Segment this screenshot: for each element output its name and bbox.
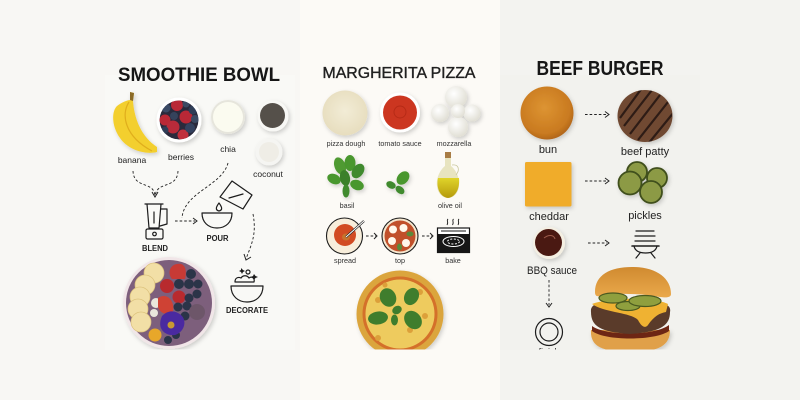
arrow: blend to pour — [175, 218, 197, 224]
label: coconut: coconut — [253, 169, 284, 179]
label: top: top — [395, 256, 405, 265]
arrow: banana and berries to blend — [133, 171, 178, 197]
icon: bun — [520, 86, 574, 140]
label: banana: banana — [118, 155, 146, 165]
icon: plate — [536, 318, 562, 346]
icon: pour bowl — [202, 213, 232, 228]
label: basil: basil — [340, 201, 355, 210]
icon: basil — [326, 155, 367, 198]
photo: burger — [591, 267, 671, 352]
icon: bbq sauce — [533, 227, 565, 259]
icon: cheddar — [525, 162, 572, 206]
icon: basil sprig — [385, 169, 412, 196]
arrow: bun to patty — [585, 112, 609, 118]
panel: smoothie bowl — [113, 64, 289, 349]
icon: chia bowl — [258, 100, 288, 132]
icon: top — [382, 218, 418, 254]
label: chia: chia — [220, 144, 236, 154]
panel: margherita pizza — [322, 65, 480, 358]
arrow: chia to pour — [182, 163, 228, 218]
icon: measuring jug pouring — [216, 181, 252, 211]
label: cheddar: cheddar — [529, 211, 569, 223]
arrow: spread to top — [366, 233, 377, 239]
label: pickles: pickles — [628, 210, 662, 222]
label: bbq sauce: BBQ sauce — [527, 265, 577, 277]
heading: margherita pizza: MARGHERITA PIZZA — [322, 65, 476, 82]
label: bun: bun — [539, 144, 557, 156]
arrow: bbq sauce to finish — [546, 280, 552, 307]
panel: beef burger — [520, 58, 674, 356]
label: spread: spread — [334, 256, 356, 265]
photo: pizza — [356, 270, 444, 358]
label: pour: POUR — [206, 234, 229, 243]
label: bake: bake — [445, 256, 461, 265]
label: mozzarella: mozzarella — [437, 139, 471, 148]
icon: coconut bowl — [256, 138, 282, 166]
photo: smoothie bowl — [123, 257, 215, 349]
icon: decorate bowl — [231, 268, 263, 302]
label: finish: finish — [538, 346, 560, 356]
icon: tomato sauce — [380, 92, 420, 132]
icon: oven — [438, 219, 470, 252]
label: berries: berries — [168, 152, 194, 162]
icon: mozzarella — [431, 86, 480, 137]
icon: beef patty — [618, 88, 674, 144]
label: blend: BLEND — [142, 244, 168, 253]
heading: beef burger: BEEF BURGER — [536, 58, 664, 80]
icon: blender — [145, 204, 167, 239]
label: decorate: DECORATE — [226, 306, 269, 315]
arrow: pour to decorate — [244, 214, 254, 260]
icon: spread — [326, 218, 364, 254]
label: pizza dough: pizza dough — [327, 139, 365, 148]
icon: banana — [113, 92, 157, 153]
arrow: bbq sauce to grill — [588, 240, 609, 246]
heading: smoothie bowl: SMOOTHIE BOWL — [118, 64, 280, 86]
label: beef patty: beef patty — [621, 146, 670, 158]
icon: milk glass — [211, 100, 245, 134]
icon: pickles — [618, 162, 667, 203]
arrow: cheddar to pickles — [585, 178, 609, 184]
arrow: top to bake — [422, 233, 433, 239]
icon: olive oil — [437, 152, 459, 198]
icon: pizza dough — [322, 90, 368, 136]
icon: berries bowl — [156, 98, 202, 142]
icon: grill — [632, 231, 659, 258]
label: olive oil: olive oil — [438, 201, 462, 210]
label: tomato sauce: tomato sauce — [378, 139, 422, 148]
